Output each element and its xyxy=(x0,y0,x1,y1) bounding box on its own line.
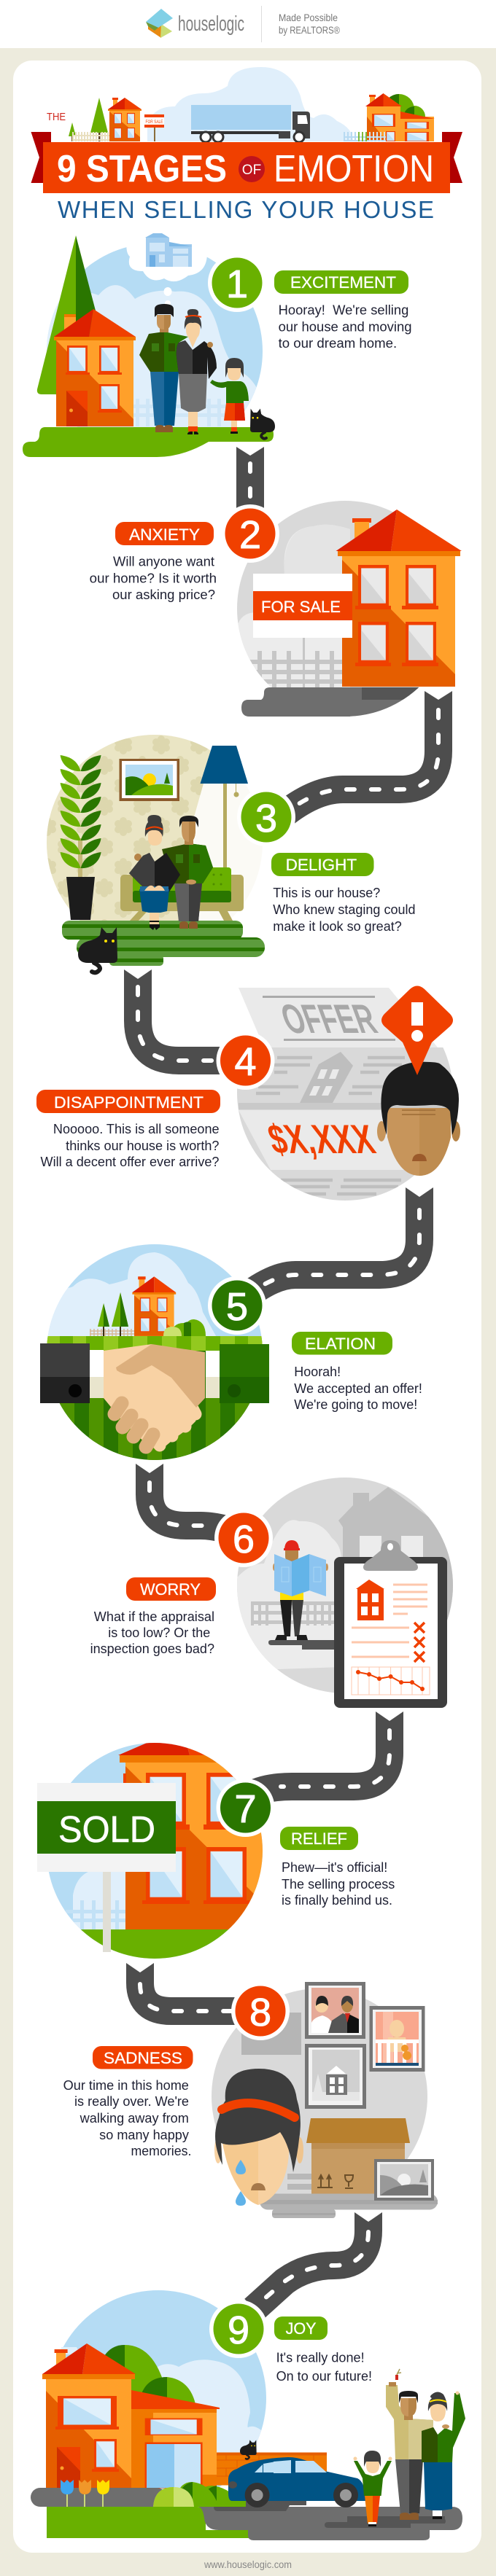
panel: stage 8 sadness xyxy=(208,1982,438,2218)
picture: baby xyxy=(369,2006,425,2072)
icon: house on report xyxy=(356,1580,384,1620)
sold sign: SOLD xyxy=(58,1808,155,1850)
text: anxiety xyxy=(90,555,217,602)
panel: stage 2 anxiety xyxy=(233,496,467,722)
text: delight: Who knew staging could xyxy=(273,902,416,917)
family xyxy=(139,304,249,434)
house silhouette xyxy=(338,1487,453,1620)
icon: dream house xyxy=(145,233,193,267)
cream fence xyxy=(73,132,109,141)
label: disappointment: DISAPPOINTMENT xyxy=(54,1093,204,1112)
handshake xyxy=(40,1343,269,1449)
right trees xyxy=(384,94,425,141)
couple xyxy=(129,815,213,930)
sky circle xyxy=(55,2290,266,2490)
girl xyxy=(210,358,249,434)
label: anxiety xyxy=(115,522,214,545)
trees xyxy=(98,1292,128,1336)
label: sadness xyxy=(93,2046,193,2069)
light hand xyxy=(104,1344,200,1449)
gray circle scene xyxy=(237,1478,453,1693)
icon: warning marker xyxy=(381,985,453,1075)
child xyxy=(353,2451,392,2526)
man xyxy=(162,816,213,929)
text: worry: inspection goes bad? xyxy=(90,1642,214,1656)
label: delight xyxy=(271,853,373,876)
badge: of xyxy=(239,156,265,182)
truck xyxy=(191,105,310,142)
bushes xyxy=(163,1319,206,1336)
fence xyxy=(133,399,232,426)
sign post xyxy=(303,638,305,687)
left house xyxy=(108,98,142,141)
panel: stage 7 relief xyxy=(37,1743,263,1959)
text: worry: What if the appraisal xyxy=(94,1609,214,1624)
road 7 to 8 xyxy=(126,1963,237,2011)
text: disappointment: Nooooo. This is all someone xyxy=(53,1122,220,1136)
price: $X,XXX xyxy=(263,1117,380,1163)
made possible credit xyxy=(279,12,341,36)
number badge 2 xyxy=(221,504,279,563)
white cuffs xyxy=(90,1350,220,1398)
number badge 4 xyxy=(216,1031,274,1090)
icon: cat xyxy=(250,409,275,439)
number badge 4: 4 xyxy=(234,1040,257,1084)
label: elation xyxy=(292,1332,392,1354)
label: delight: DELIGHT xyxy=(286,856,357,874)
room circle xyxy=(44,729,270,921)
text: excitement: to our dream home. xyxy=(279,336,397,351)
gray circle xyxy=(208,1983,434,2194)
inspector xyxy=(273,1540,328,1640)
number badge 8 xyxy=(231,1982,290,2040)
text: sadness: walking away from xyxy=(80,2111,189,2126)
footer url: www.houselogic.com xyxy=(204,2559,292,2570)
sofa xyxy=(120,867,244,921)
brick wall xyxy=(217,2452,327,2486)
man xyxy=(386,2369,433,2520)
number badge 6: 6 xyxy=(233,1518,255,1561)
small fence xyxy=(90,1329,136,1336)
label: sadness: SADNESS xyxy=(104,2049,182,2067)
newspaper rules xyxy=(256,1058,405,1194)
newspaper xyxy=(237,988,452,1201)
for sale sign: FOR SALE xyxy=(261,598,341,616)
text: disappointment: Will a decent offer ever arrive? xyxy=(41,1155,219,1169)
number badge 3 xyxy=(237,788,295,846)
text: excitement: our house and moving xyxy=(279,319,412,334)
icon: framed picture xyxy=(120,759,179,801)
made possible credit: by REALTORS® xyxy=(279,24,341,36)
cloud xyxy=(237,525,350,687)
label: joy: JOY xyxy=(286,2319,317,2338)
stack of lines xyxy=(287,2174,311,2190)
number badge 1 xyxy=(208,254,266,312)
house xyxy=(54,309,136,426)
label: worry: WORRY xyxy=(140,1580,201,1599)
icon: cat on wall xyxy=(240,2440,257,2459)
text: anxiety: our home? Is it worth xyxy=(90,571,217,585)
text: sadness: memories. xyxy=(131,2144,191,2158)
icon: handling marks xyxy=(317,2175,353,2188)
tall tree xyxy=(90,98,108,141)
road 2 to 3 xyxy=(283,691,452,815)
for sale sign xyxy=(144,114,164,141)
number badge 7: 7 xyxy=(234,1787,257,1831)
man xyxy=(139,304,188,432)
clipboard xyxy=(334,1540,447,1708)
fence and shrub xyxy=(344,132,386,141)
panel: stage 4 disappointment xyxy=(233,985,472,1204)
text: elation: We're going to move! xyxy=(294,1397,417,1412)
label: joy xyxy=(274,2317,328,2340)
text: disappointment xyxy=(41,1122,220,1169)
text: relief: Phew—it's official! xyxy=(282,1860,387,1875)
house xyxy=(42,2343,220,2489)
for sale sign: FOR SALE xyxy=(146,120,163,125)
panel: stage 1 excitement xyxy=(23,233,275,457)
for sale sign xyxy=(253,574,352,638)
ground extension xyxy=(241,687,360,717)
icon: tall tree xyxy=(37,235,96,394)
bushes xyxy=(153,2482,246,2507)
badge: of: OF xyxy=(242,163,261,178)
label: worry xyxy=(126,1577,216,1601)
road 4 to 5 xyxy=(249,1187,433,1294)
header bar xyxy=(0,0,496,48)
teardrops xyxy=(236,2160,246,2174)
left sleeve xyxy=(40,1343,90,1403)
label: excitement: EXCITEMENT xyxy=(290,273,396,292)
house xyxy=(336,510,462,687)
newspaper house photo xyxy=(300,1052,353,1103)
text: relief: The selling process xyxy=(282,1877,395,1892)
title: 9 stages: 9 STAGES xyxy=(57,148,227,190)
text: anxiety: our asking price? xyxy=(112,588,215,602)
picture: landscape xyxy=(374,2159,434,2201)
label: anxiety: ANXIETY xyxy=(129,526,200,544)
text: elation: We accepted an offer! xyxy=(294,1381,422,1396)
gray circle scene xyxy=(237,501,419,717)
text: sadness: Our time in this home xyxy=(63,2078,189,2093)
text: disappointment: thinks our house is worth? xyxy=(66,1139,219,1153)
car xyxy=(228,2457,365,2507)
trees xyxy=(98,2345,197,2413)
panel: stage 6 worry xyxy=(233,1472,467,1708)
number badge 6 xyxy=(214,1509,273,1567)
icon: floor lamp xyxy=(200,746,248,871)
number badge 3: 3 xyxy=(255,797,277,840)
dark hand fingers xyxy=(115,1403,153,1447)
sad woman xyxy=(214,2069,303,2206)
dark hand xyxy=(116,1344,205,1408)
label: elation: ELATION xyxy=(305,1335,376,1353)
label: relief: RELIEF xyxy=(291,1830,347,1848)
logo wordmark: houselogic xyxy=(178,12,244,36)
label: excitement xyxy=(274,270,408,294)
moving box xyxy=(306,2118,410,2194)
text: sadness: is really over. We're xyxy=(74,2094,189,2109)
text: sadness xyxy=(63,2078,191,2158)
main wall xyxy=(46,2379,131,2488)
red crosses xyxy=(414,1623,425,1662)
wing xyxy=(131,2390,220,2488)
road 8 to 9 xyxy=(254,2212,382,2309)
text: joy: It's really done! xyxy=(276,2350,365,2365)
made possible credit: Made Possible xyxy=(279,12,338,23)
text: excitement: Hooray! We're selling xyxy=(279,303,408,318)
hero illustration xyxy=(47,67,435,142)
number badge 8: 8 xyxy=(249,1991,271,2034)
windows xyxy=(55,2396,203,2489)
number badge 9: 9 xyxy=(228,2308,249,2352)
road 5 to 6 xyxy=(136,1464,226,1529)
text: sadness: so many happy xyxy=(99,2128,189,2142)
text: worry xyxy=(90,1609,214,1656)
woman xyxy=(422,2391,465,2519)
cloud xyxy=(44,285,270,430)
text: joy xyxy=(276,2350,372,2384)
sign post xyxy=(103,1872,111,1952)
subtitle: WHEN SELLING YOUR HOUSE xyxy=(58,196,434,223)
number badge 7 xyxy=(216,1779,274,1837)
ground strip xyxy=(268,1640,336,1650)
scene circle xyxy=(44,1239,270,1464)
ground xyxy=(23,427,274,457)
picture: house xyxy=(305,2044,366,2109)
panel: stage 5 elation xyxy=(40,1239,270,1464)
icon: houselogic logo xyxy=(146,9,173,38)
light hand fingers xyxy=(155,1403,195,1445)
woman xyxy=(129,815,180,930)
text: worry: is too low? Or the xyxy=(108,1625,210,1640)
ribbon tails xyxy=(31,132,462,183)
blueprint xyxy=(274,1554,326,1596)
number badge 2: 2 xyxy=(239,513,261,557)
picture: wedding xyxy=(305,1982,365,2039)
title banner xyxy=(31,132,462,193)
fence xyxy=(241,651,343,687)
headline: OFFER xyxy=(275,997,383,1042)
title: emotion: EMOTION xyxy=(274,148,434,190)
fence xyxy=(66,1900,125,1929)
number badge 5 xyxy=(208,1276,266,1335)
banner body xyxy=(43,142,450,193)
text: joy: On to our future! xyxy=(276,2369,372,2384)
number badge 5: 5 xyxy=(226,1285,248,1329)
icon: plant xyxy=(61,755,101,920)
chimney xyxy=(55,2349,68,2368)
number badge 1: 1 xyxy=(226,262,248,306)
small tree xyxy=(69,122,76,141)
face xyxy=(377,1062,460,1176)
number badge 9 xyxy=(209,2300,268,2358)
road 1 to 2 xyxy=(236,447,264,510)
panel: stage 9 joy xyxy=(31,2285,465,2540)
icon: tulips xyxy=(61,2480,109,2507)
text: relief xyxy=(282,1860,395,1908)
line chart xyxy=(352,1667,430,1695)
cloud backdrop xyxy=(147,67,353,141)
icon: cat xyxy=(78,927,117,972)
right sleeve xyxy=(220,1344,269,1403)
text: anxiety: Will anyone want xyxy=(113,555,214,569)
sold sign xyxy=(37,1783,176,1872)
big house xyxy=(118,1743,263,1929)
road 3 to 4 xyxy=(124,969,226,1061)
cloud xyxy=(233,1520,341,1671)
text: relief: is finally behind us. xyxy=(282,1893,392,1908)
blank wall square xyxy=(241,2013,301,2055)
door xyxy=(57,2447,80,2488)
woman xyxy=(177,309,217,434)
thought cloud xyxy=(126,233,207,306)
driveway and green ground xyxy=(31,2488,462,2540)
fence xyxy=(251,1601,336,1625)
roof xyxy=(42,2343,136,2374)
right house xyxy=(365,93,435,141)
family celebrating xyxy=(353,2369,465,2526)
scene circle xyxy=(48,1743,263,1959)
sky circle xyxy=(44,241,270,430)
text: elation: Hoorah! xyxy=(294,1365,341,1379)
text: delight: make it look so great? xyxy=(273,919,402,934)
clip xyxy=(363,1540,418,1571)
house xyxy=(132,1276,176,1336)
hair xyxy=(215,2069,301,2172)
label: relief xyxy=(280,1827,358,1850)
text: the: THE xyxy=(47,112,66,123)
text: delight xyxy=(273,886,416,934)
clouds xyxy=(158,2360,261,2452)
text: delight: This is our house? xyxy=(273,886,380,900)
report lines xyxy=(352,1585,427,1657)
label: disappointment xyxy=(36,1090,220,1113)
shelf xyxy=(260,2194,438,2218)
road 6 to 7 xyxy=(252,1712,403,1795)
icon: house keys xyxy=(395,2369,401,2380)
floor xyxy=(62,921,266,966)
panel: stage 3 delight xyxy=(44,729,270,972)
text: elation xyxy=(294,1365,422,1412)
cloud xyxy=(73,1872,125,1929)
text: excitement xyxy=(279,303,412,351)
